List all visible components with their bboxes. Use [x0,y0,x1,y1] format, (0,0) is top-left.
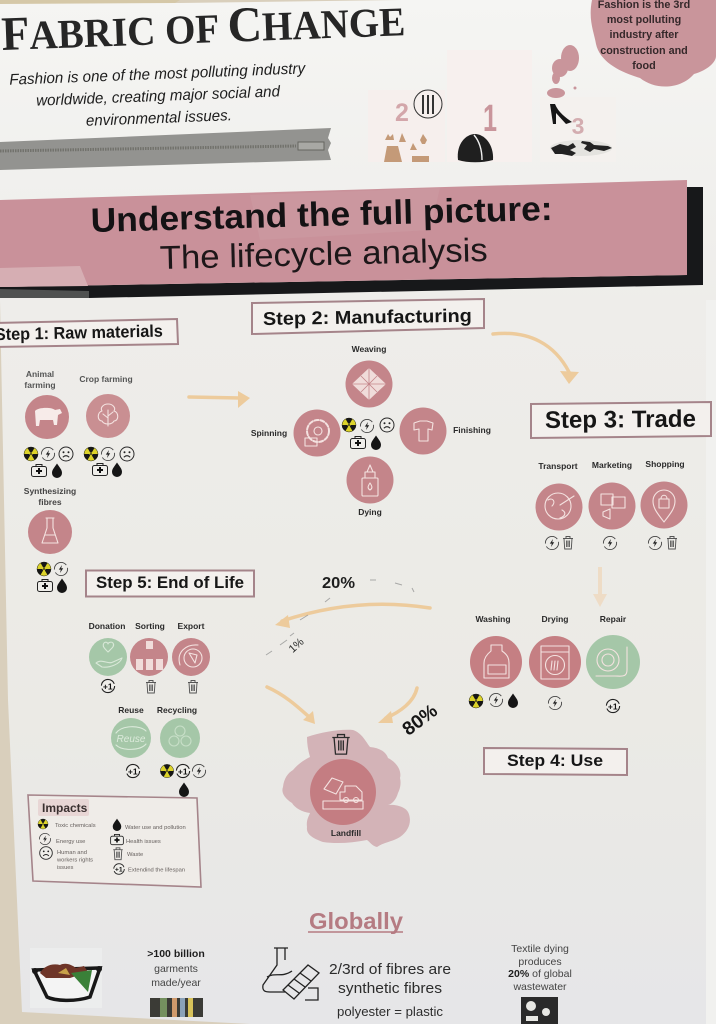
step 4 heading [484,748,627,775]
stat: synthetic fibres [263,948,451,1019]
item: animal farming [24,369,73,478]
impact icons: manufacturing [342,418,394,450]
item: repair: Repair [600,614,627,624]
legend: waste [113,848,143,860]
banner title: Understand the full picture: [90,190,553,240]
flow: 20 percent [275,575,430,628]
flow: 1 percent: 1% [287,636,307,656]
legend: toxic chemicals: Toxic chemicals [55,823,96,829]
stat: wastewater [508,943,572,1024]
smoke plumes [547,45,579,98]
legend: toxic chemicals [38,819,96,829]
icon: plate and cutlery [414,90,442,118]
stat text [329,961,451,1019]
item: export: Export [178,621,205,631]
item: donation: Donation [89,621,125,631]
item: donation [89,621,127,693]
step 4: use [469,614,640,775]
legend: impacts [28,795,201,887]
step 5 heading [86,570,254,596]
banner subtitle: The lifecycle analysis [159,231,488,276]
callout bubble: third most polluting: industry after [610,29,679,41]
item: drying [529,614,581,710]
stat text [508,943,572,993]
heading: globally: Globally [309,908,403,934]
item: shopping [640,459,688,550]
item: sorting [130,621,168,693]
icon: laundry basket [30,948,102,1008]
item: repair [586,614,640,713]
intro text: worldwide, creating major social and [36,83,282,110]
item: sorting: Sorting [135,621,165,631]
legend: human and workers rights: issues [57,865,74,871]
stat text: made/year [151,977,201,989]
stat text: Textile dying [511,943,569,955]
item: reuse: Reuse [117,734,146,745]
callout bubble: third most polluting [591,0,716,87]
item: washing: Washing [475,614,511,624]
item: washing [469,614,522,708]
item: spinning: Spinning [251,428,287,438]
stat text: produces [518,956,562,968]
zipper illustration [0,128,331,170]
rank 1: 1 [483,98,497,140]
item: spinning [251,410,340,456]
item: finishing: Finishing [453,425,491,435]
item: marketing: Marketing [592,460,632,470]
stat: garments [30,948,205,1017]
flow: 20 percent: 20% [322,575,355,592]
step 3 heading [531,402,711,438]
icon: polluted water [521,997,558,1024]
legend: health issues: Health issues [126,839,161,845]
item: synthesizing fibres [24,486,76,593]
icon: yarn spool [283,965,319,1000]
legend: human and workers rights [40,847,93,871]
item: reuse: Reuse [118,705,144,715]
icon: oil spill [550,140,612,156]
podium chart: polluting industry ranking [368,45,616,162]
legend: extending lifespan [114,864,185,874]
item: weaving: Weaving [352,344,386,354]
legend: water use [113,819,186,831]
item: export [172,621,210,693]
item: animal farming: farming [24,380,56,390]
step 4 heading: Step 4: Use [507,751,603,770]
icon: hard hat [458,134,493,162]
rank 3: 3 [572,113,584,139]
callout bubble: third most polluting: construction and [600,45,688,57]
legend title: Impacts [42,801,88,815]
step 5 heading: Step 5: End of Life [96,573,244,592]
item: weaving [346,344,392,408]
icon: flask [263,948,292,992]
legend: health issues [111,834,161,845]
legend: extending lifespan: Extendind the lifespan [128,868,185,874]
legend: human and workers rights: workers rights [56,858,93,864]
arrow: step 1 to step 2 [189,391,250,408]
step 2 heading: Step 2: Manufacturing [263,305,472,329]
legend: energy use: Energy use [56,839,85,845]
legend: water use: Water use and pollution [125,825,186,831]
banner: lifecycle analysis heading [0,180,703,298]
step 2 heading [252,299,484,334]
flow: 1 percent [266,633,307,656]
item: animal farming: Animal [26,369,54,379]
stat text: synthetic fibres [338,980,442,997]
step 2: manufacturing [251,299,491,517]
arrow: step 3 to step 4 [593,567,607,607]
step 5: end of life [86,570,254,797]
item: synthesizing fibres: Synthesizing [24,486,76,496]
item: transport: Transport [538,461,578,471]
item: transport [536,461,582,550]
arrow: to landfill from end of life [267,687,315,724]
intro text: Fashion is one of the most polluting industry [9,60,307,89]
stat text: >100 billion [147,948,205,960]
stat text: polyester = plastic [337,1004,443,1019]
intro text: environmental issues. [86,107,232,130]
icon: dump truck [323,778,363,809]
callout bubble: third most polluting: most polluting [607,14,681,26]
item: recycling [157,705,206,797]
rank 2: 2 [395,99,409,127]
stat text: garments [154,963,198,975]
label: 80 percent: 80% [399,701,442,740]
icon: high heel [550,104,572,124]
legend: human and workers rights: Human and [57,850,87,856]
arrow: 80 percent to landfill [378,688,417,723]
stat text: wastewater [512,981,567,993]
legend: energy use [39,833,85,845]
step 3 heading: Step 3: Trade [545,406,696,434]
stat text: 2/3rd of fibres are [329,961,451,978]
callout bubble: third most polluting: food [632,60,656,72]
item: reuse [111,705,151,778]
item: recycling: Recycling [157,705,197,715]
item: synthesizing fibres: fibres [38,497,62,507]
stat text: 20% of global [508,968,572,980]
icon: tree stumps [384,133,429,162]
item: drying: Drying [542,614,568,624]
item: crop farming: Crop farming [79,374,133,384]
legend: waste: Waste [127,852,143,858]
item: marketing [588,460,636,550]
icon: waste bin [332,735,350,754]
icon: clothes rack [150,998,203,1017]
landfill [282,730,410,847]
step 1: raw materials [0,319,178,593]
intro text [9,60,308,133]
item: dying [346,456,394,517]
stat text [147,948,205,989]
item: crop farming [79,374,134,477]
item: dying: Dying [358,507,382,517]
item: shopping: Shopping [645,459,685,469]
arrow: step 2 to step 3 [493,333,579,384]
step 3: trade [531,402,711,550]
item: finishing [400,408,491,454]
landfill: Landfill [331,828,361,838]
